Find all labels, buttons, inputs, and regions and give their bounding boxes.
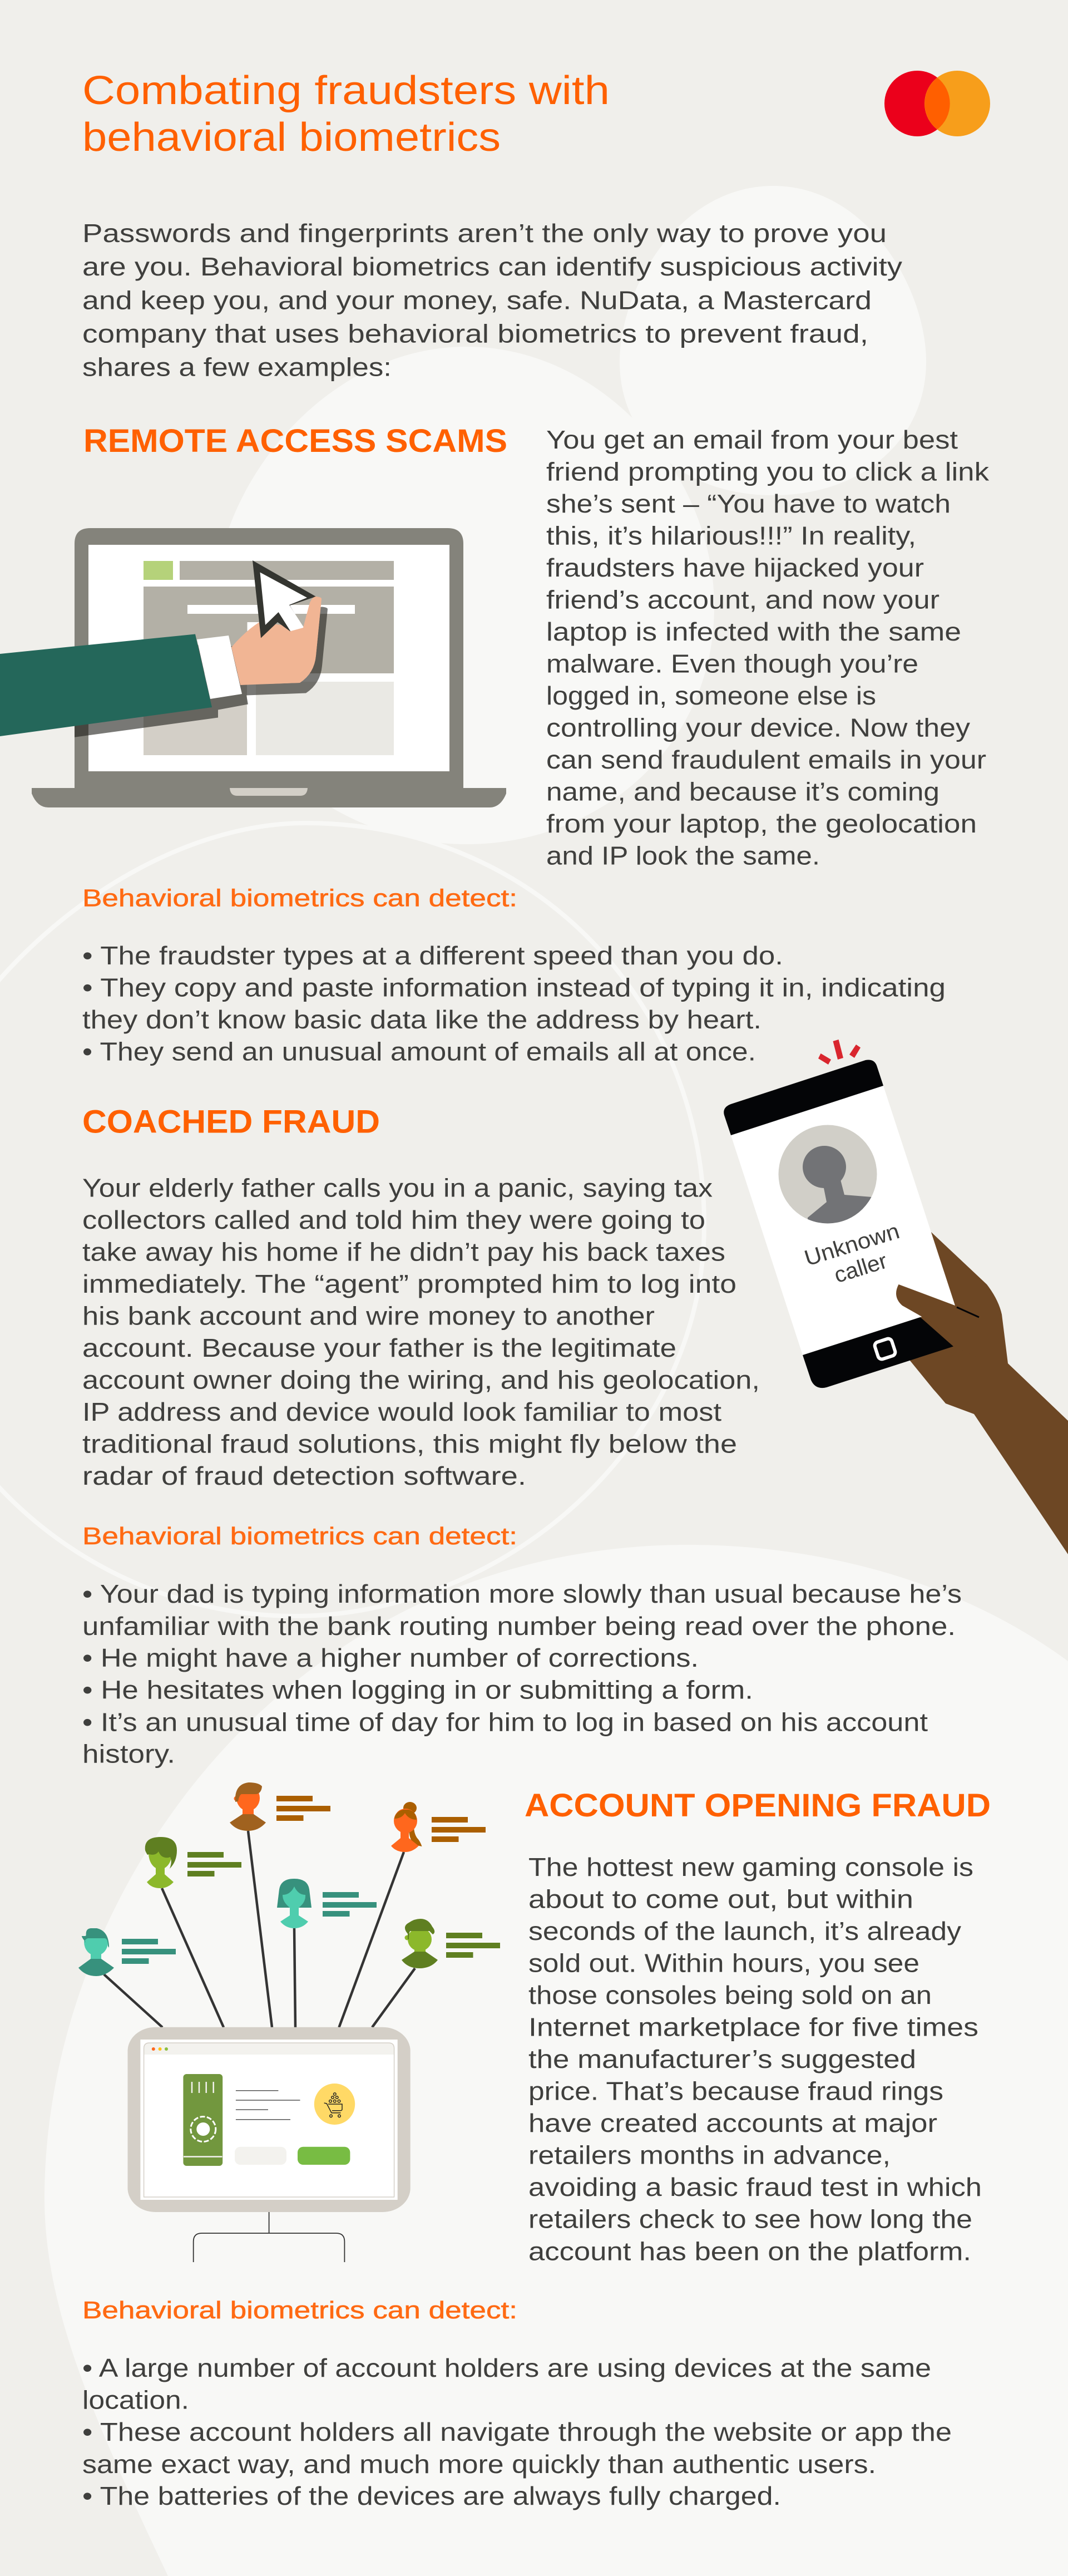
caller avatar	[779, 1125, 879, 1230]
account opening fraud body text: account has been on the platform.	[528, 2237, 971, 2266]
account opening bullets: • A large number of account holders are using devices at the same	[82, 2353, 931, 2382]
coached fraud bullets	[82, 1579, 962, 1769]
remote access body text: laptop is infected with the same	[546, 617, 961, 646]
coached fraud bullets: • He hesitates when logging in or submitting a form.	[82, 1675, 753, 1704]
hand behind phone	[910, 1232, 1068, 1554]
remote access body text: this, it’s hilarious!!!” In reality,	[546, 521, 916, 550]
remote access body text: name, and because it’s coming	[546, 777, 940, 806]
coached fraud bullets: • He might have a higher number of corrections.	[82, 1643, 699, 1672]
account opening fraud body text: those consoles being sold on an	[528, 1981, 932, 2009]
phone screen	[731, 1086, 955, 1355]
cursor arrow	[253, 560, 316, 638]
jacket sleeve	[0, 634, 212, 736]
account holder 5: orange woman	[391, 1802, 486, 1852]
remote access bullets	[82, 941, 946, 1066]
shirt cuff	[197, 636, 242, 699]
title: behavioral biometrics	[82, 115, 501, 160]
remote access body text: You get an email from your best	[546, 425, 958, 454]
intro text: are you. Behavioral biometrics can identify suspicious activity	[82, 252, 902, 281]
hand palm	[231, 599, 322, 685]
account opening fraud body text: avoiding a basic fraud test in which	[528, 2173, 982, 2201]
intro text: and keep you, and your money, safe. NuData, a Mastercard	[82, 286, 872, 315]
coached fraud body text: account owner doing the wiring, and his geolocation,	[82, 1366, 760, 1395]
account holder 6: green man	[402, 1919, 500, 1968]
heading: remote access scams: REMOTE ACCESS SCAMS	[83, 423, 507, 459]
heading: coached fraud: COACHED FRAUD	[82, 1104, 380, 1140]
hand finger	[267, 597, 322, 684]
account holder 4: teal woman	[277, 1879, 377, 1928]
phone top bar	[724, 1060, 883, 1135]
remote access body text: and IP look the same.	[546, 841, 820, 870]
remote access body text: controlling your device. Now they	[546, 713, 970, 742]
remote access body text: logged in, someone else is	[546, 681, 876, 710]
title	[82, 68, 610, 160]
coached fraud body text: immediately. The “agent” prompted him to log into	[82, 1269, 736, 1298]
intro text: shares a few examples:	[82, 353, 392, 382]
laptop screen content	[144, 561, 394, 755]
coached fraud body text: collectors called and told him they were going to	[82, 1205, 705, 1234]
coached fraud bullets: history.	[82, 1740, 175, 1769]
coached fraud body text	[82, 1173, 760, 1490]
account opening fraud body text: The hottest new gaming console is	[528, 1853, 973, 1881]
remote access body text: fraudsters have hijacked your	[546, 553, 924, 582]
remote access bullets: • The fraudster types at a different speed than you do.	[82, 941, 783, 970]
illustration: laptop with hand and cursor	[0, 528, 506, 807]
remote access body text: friend’s account, and now your	[546, 585, 940, 614]
game console box	[183, 2074, 222, 2166]
heading: account opening fraud: ACCOUNT OPENING FRAUD	[525, 1787, 991, 1824]
coached fraud bullets: • Your dad is typing information more slowly than usual because he’s	[82, 1579, 962, 1608]
browser window	[144, 2043, 394, 2197]
phone home button	[874, 1338, 896, 1360]
coached fraud bullets: • It’s an unusual time of day for him to log in based on his account	[82, 1707, 928, 1736]
intro text: Passwords and fingerprints aren’t the only way to prove you	[82, 219, 887, 248]
coached fraud body text: traditional fraud solutions, this might fly below the	[82, 1429, 737, 1458]
remote access body text: friend prompting you to click a link	[546, 457, 990, 486]
subheading: behavioral biometrics can detect (remote access): Behavioral biometrics can detect:	[82, 885, 517, 912]
subheading: behavioral biometrics can detect (coached fraud): Behavioral biometrics can detect:	[82, 1523, 517, 1550]
account opening fraud body text: about to come out, but within	[528, 1884, 913, 1913]
unknown caller label: Unknown	[802, 1219, 902, 1271]
account opening fraud body text: retailers check to see how long the	[528, 2205, 972, 2234]
account opening fraud body text: sold out. Within hours, you see	[528, 1949, 919, 1978]
account opening fraud body text: have created accounts at major	[528, 2109, 937, 2137]
coached fraud body text: Your elderly father calls you in a panic, saying tax	[82, 1173, 713, 1202]
illustration: account holders connected to shopping site	[78, 1782, 500, 2262]
account opening bullets: • The batteries of the devices are always fully charged.	[82, 2481, 781, 2510]
coached fraud bullets: unfamiliar with the bank routing number being read over the phone.	[82, 1612, 956, 1641]
hand thumb	[896, 1284, 979, 1358]
account holder 3: orange man	[230, 1782, 330, 1831]
intro text: company that uses behavioral biometrics to prevent fraud,	[82, 319, 868, 348]
phone bottom bar	[803, 1317, 953, 1388]
coached fraud body text: radar of fraud detection software.	[82, 1461, 526, 1490]
remote access bullets: • They send an unusual amount of emails all at once.	[82, 1037, 756, 1066]
account opening fraud body text: the manufacturer’s suggested	[528, 2045, 916, 2073]
account opening bullets: same exact way, and much more quickly than authentic users.	[82, 2450, 876, 2479]
remote access body text	[546, 425, 990, 870]
remote access body text: malware. Even though you’re	[546, 649, 918, 678]
coached fraud body text: IP address and device would look familiar to most	[82, 1397, 721, 1426]
subheading: behavioral biometrics can detect (account opening): Behavioral biometrics can detect:	[82, 2297, 517, 2324]
monitor	[128, 2027, 411, 2212]
remote access bullets: they don’t know basic data like the address by heart.	[82, 1005, 762, 1034]
title: Combating fraudsters with	[82, 68, 610, 113]
account opening fraud body text: Internet marketplace for five times	[528, 2012, 978, 2041]
account opening fraud body text: price. That’s because fraud rings	[528, 2077, 943, 2106]
coached fraud body text: his bank account and wire money to another	[82, 1301, 655, 1330]
account opening fraud body text	[528, 1853, 982, 2266]
account opening bullets: • These account holders all navigate through the website or app the	[82, 2417, 952, 2446]
account holder 2: green person	[145, 1837, 241, 1888]
ringing marks	[818, 1040, 861, 1065]
account opening bullets	[82, 2353, 952, 2510]
intro text	[82, 219, 902, 382]
remote access body text: can send fraudulent emails in your	[546, 745, 986, 774]
connector lines	[104, 1831, 415, 2027]
shopping cart badge	[314, 2084, 355, 2125]
remote access body text: from your laptop, the geolocation	[546, 809, 977, 838]
buttons	[235, 2147, 350, 2165]
account opening fraud body text: retailers months in advance,	[528, 2140, 891, 2169]
laptop body	[32, 528, 506, 807]
coached fraud body text: account. Because your father is the legitimate	[82, 1333, 676, 1362]
illustration: phone with unknown caller held in hand	[724, 1040, 1068, 1554]
unknown caller label: caller	[831, 1249, 890, 1288]
coached fraud body text: take away his home if he didn’t pay his back taxes	[82, 1238, 725, 1267]
remote access bullets: • They copy and paste information instead of typing it in, indicating	[82, 973, 946, 1002]
monitor stand bracket	[194, 2212, 344, 2262]
arm and hand shadow	[75, 607, 328, 737]
account holder 1: teal man	[78, 1928, 176, 1976]
product description lines	[236, 2091, 300, 2120]
remote access body text: she’s sent – “You have to watch	[546, 489, 951, 518]
unknown caller label	[802, 1219, 902, 1288]
account opening bullets: location.	[82, 2385, 189, 2414]
account opening fraud body text: seconds of the launch, it’s already	[528, 1917, 961, 1945]
icon: Mastercard logo	[884, 71, 990, 136]
